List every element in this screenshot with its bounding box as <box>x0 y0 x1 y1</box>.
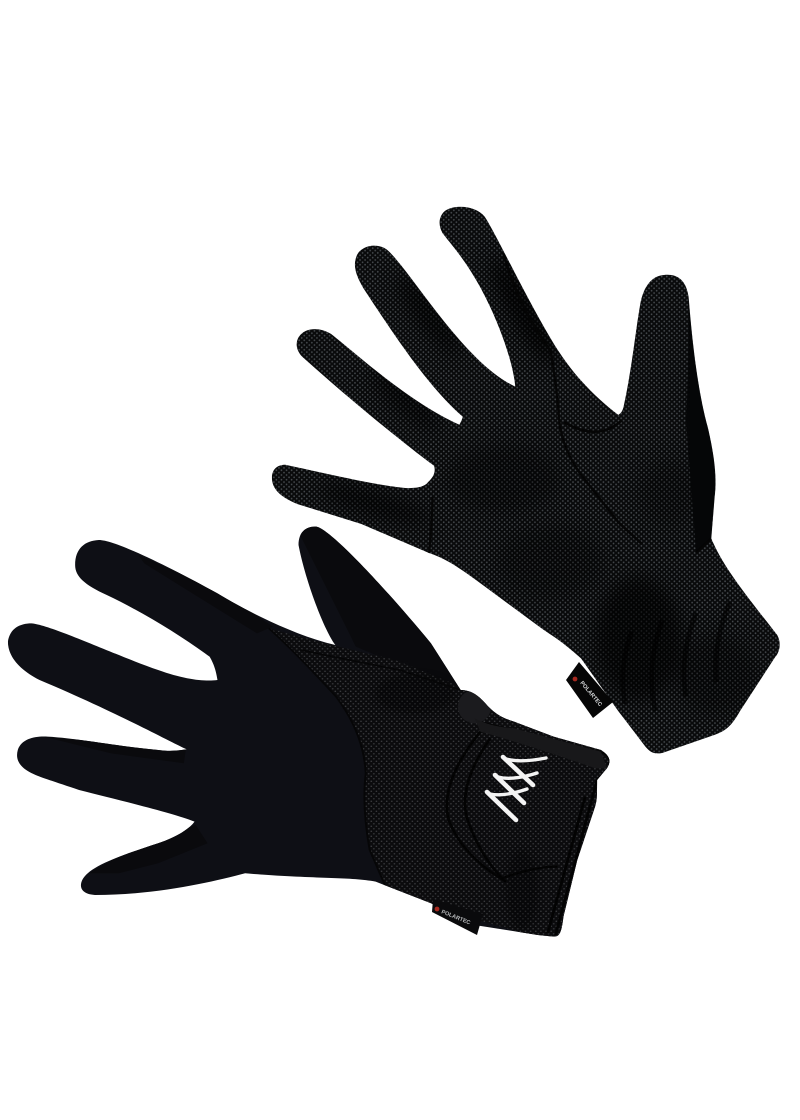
product image: pair of riding gloves <box>8 206 780 937</box>
strap with edge <box>447 723 610 935</box>
lower glove: back of hand with mesh cuff <box>0 520 633 953</box>
fingertip grip patches <box>69 556 267 872</box>
seams <box>429 253 711 553</box>
lower glove label tag: POLARTEC <box>440 909 471 926</box>
smooth fabric <box>0 520 633 953</box>
logo on strap <box>487 757 546 820</box>
knob at strap base <box>458 690 491 723</box>
mesh panel <box>271 629 610 937</box>
mesh seam <box>269 628 461 887</box>
upper glove: palm side with textured grip <box>260 195 790 765</box>
upper glove label tag <box>566 662 613 718</box>
lower glove label tag <box>432 899 483 935</box>
thumb side panel <box>686 297 716 553</box>
grip texture <box>260 195 790 765</box>
thumb <box>300 526 465 690</box>
upper glove label tag: POLARTEC <box>578 680 603 708</box>
cuff wrinkles <box>623 602 730 711</box>
